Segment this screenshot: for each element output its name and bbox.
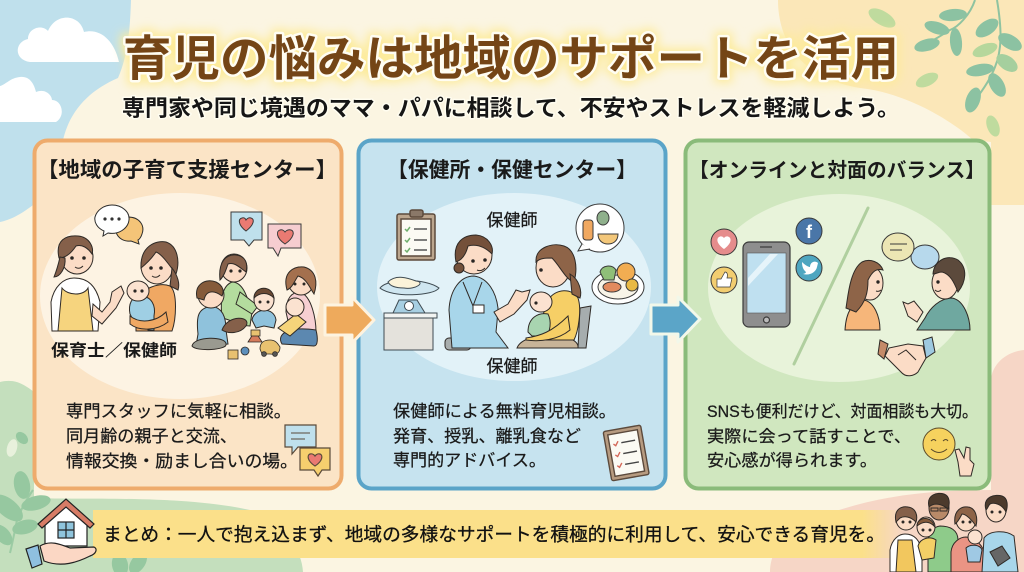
icon: bird bubble (796, 255, 822, 281)
person: child (917, 517, 936, 560)
text: panel 3 body: SNSも便利だけど、対面相談も大切。 (707, 402, 978, 421)
icon: smiley (923, 428, 955, 460)
text: panel 1 body: 情報交換・励まし合いの場。 (66, 452, 298, 471)
subtitle: 専門家や同じ境遇のママ・パパに相談して、不安やストレスを軽減しよう。 (122, 96, 900, 121)
illustration: toys (228, 330, 280, 359)
panel: オンラインと対面のバランス (686, 140, 990, 488)
arrow: orange (325, 297, 374, 343)
icon: speech bubbles (95, 205, 143, 244)
title: 育児の悩みは地域のサポートを活用 (123, 33, 899, 86)
text: panel 2 body (393, 402, 616, 470)
illustration: panel 1 background ellipse (40, 193, 320, 399)
heading: panel 2: 【保健所・保健センター】 (387, 159, 637, 182)
person: mother with baby (951, 507, 985, 572)
icon: clipboard (397, 210, 435, 260)
person: woman with apron (890, 507, 922, 572)
text: panel 3 body (707, 402, 978, 470)
decoration: hanging leaves (866, 0, 1024, 138)
heading: panel 1: 【地域の子育て支援センター】 (37, 159, 337, 182)
icon: heart bubble (711, 229, 737, 255)
text: panel 3 body: 安心感が得られます。 (707, 451, 877, 470)
label: 保健師 bottom: 保健師 (486, 357, 538, 376)
text: summary: まとめ：一人で抱え込まず、地域の多様なサポートを積極的に利用して、安心できる育児を。 (103, 524, 885, 545)
icon: conversation bubbles (882, 233, 939, 269)
illustration: panel 3 background ellipse (708, 194, 970, 382)
icon: handshake (878, 337, 935, 376)
text: panel 1 body: 専門スタッフに気軽に相談。 (66, 402, 291, 421)
icon: message bubbles (285, 425, 330, 476)
icon: thumbs up bubble (711, 267, 737, 293)
icon: hearts (231, 212, 301, 256)
decoration: clouds (0, 18, 119, 122)
label: 保健師 top: 保健師 (486, 211, 538, 230)
text: panel 1 body (66, 402, 298, 471)
panel: 保健所・保健センター (358, 140, 666, 488)
illustration: nurse (445, 235, 530, 350)
icon: checklist (603, 425, 649, 481)
text: panel 2 body: 保健師による無料育児相談。 (393, 402, 616, 421)
label: 保育士/保健師: 保育士／保健師 (51, 341, 177, 360)
decoration: bottom left leaves (0, 430, 151, 572)
heading: panel 3: 【オンラインと対面のバランス】 (689, 159, 985, 182)
icon: smartphone (743, 242, 790, 327)
divider: diagonal line (794, 208, 868, 364)
illustration: caregiver (51, 236, 124, 331)
text: panel 3 body: 実際に会って話すことで、 (707, 427, 911, 446)
illustration: family (890, 493, 1018, 572)
icon: house on hand (26, 499, 96, 568)
icon: baby scale (380, 277, 439, 350)
icon: facebook bubble: f (806, 222, 813, 242)
illustration: mother with baby (127, 242, 179, 331)
icon: peace hand (955, 447, 974, 476)
title: 育児の悩みは地域のサポートを活用 (123, 33, 899, 86)
illustration: man (903, 258, 970, 330)
text: panel 2 body: 専門的アドバイス。 (393, 451, 546, 470)
icon: food plate (592, 263, 644, 304)
person: male nurse (982, 495, 1018, 572)
illustration: woman (845, 260, 883, 330)
text: panel 1 body: 同月齢の親子と交流、 (66, 427, 237, 446)
text: panel 2 body: 発育、授乳、離乳食など (393, 427, 581, 446)
illustration: parents and children on floor (192, 254, 317, 350)
arrow: blue (651, 297, 700, 342)
person: father (928, 493, 958, 572)
icon: facebook bubble (796, 218, 822, 244)
illustration: panel 2 background ellipse (377, 193, 651, 381)
panel: 地域の子育て支援センター (34, 140, 342, 488)
banner: summary (93, 510, 903, 558)
illustration: mother with baby and chair (517, 245, 591, 348)
icon: food bubble (576, 204, 624, 252)
